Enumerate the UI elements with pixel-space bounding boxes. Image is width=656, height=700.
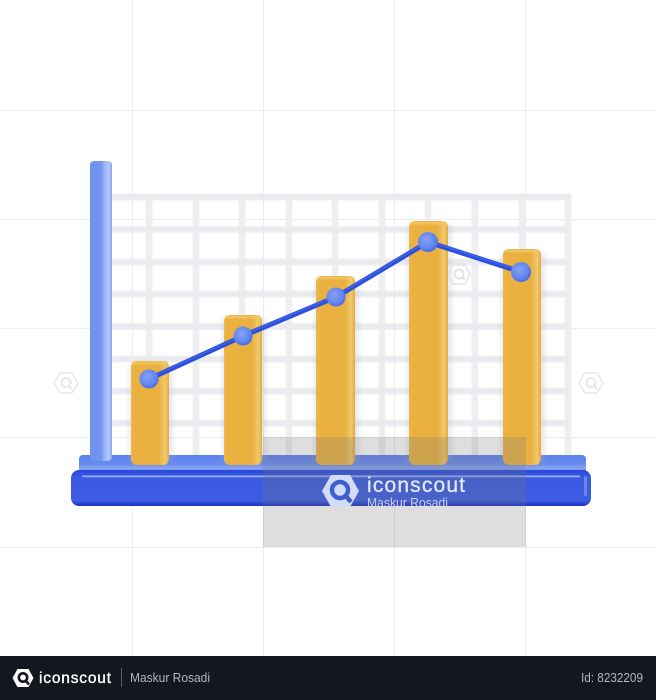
- bar 2: [222, 315, 266, 465]
- footer divider: [121, 668, 122, 687]
- data point 1: [140, 370, 158, 388]
- data point 2: [234, 326, 252, 346]
- central watermark author: Maskur Rosadi: [367, 496, 448, 510]
- base lower plate: [71, 470, 591, 506]
- bar 4: [407, 221, 452, 465]
- central watermark logo: [322, 475, 359, 507]
- footer brand name: iconscout: [39, 670, 112, 687]
- data point 3: [326, 288, 346, 306]
- footer logo icon: [12, 669, 34, 687]
- bar 3: [314, 276, 359, 465]
- footer author: Maskur Rosadi: [130, 670, 210, 685]
- central watermark text: iconscout: [367, 474, 465, 497]
- watermark overlay box: [263, 437, 526, 547]
- bar 1: [129, 361, 173, 465]
- line chart: [140, 232, 531, 388]
- data point 5: [511, 262, 531, 282]
- bar chart: [129, 221, 545, 465]
- small watermark icon centre: [449, 265, 470, 284]
- small watermark icon right: [579, 373, 603, 393]
- bar 5: [501, 249, 545, 465]
- footer id: Id: 8232209: [581, 670, 643, 685]
- lattice grid panel: [112, 194, 571, 456]
- base upper plate: [79, 455, 586, 475]
- small watermark icon left: [54, 373, 78, 393]
- data point 4: [418, 232, 438, 252]
- footer bar: [0, 656, 656, 700]
- vertical axis post: [90, 161, 112, 461]
